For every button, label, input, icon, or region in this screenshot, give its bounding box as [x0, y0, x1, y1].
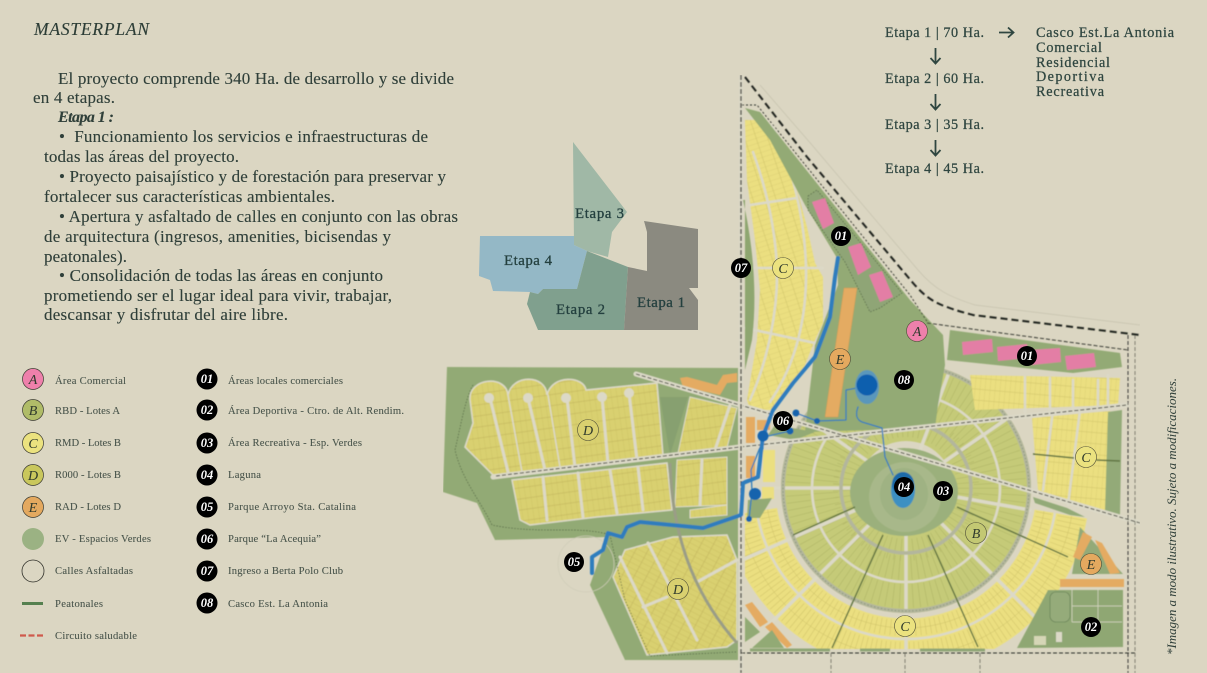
- stage labels: [504, 206, 685, 318]
- text block: project description: El proyecto comprende 340 Ha. de desarrollo y se divide: [58, 69, 454, 88]
- zone labels: Calles Asfaltadas: [55, 566, 133, 577]
- badge 08: 08: [898, 373, 911, 387]
- zone labels: R000 - Lotes B: [55, 470, 121, 481]
- center green disc: [850, 448, 958, 536]
- map number badges: [564, 226, 1101, 637]
- place labels: Laguna: [228, 470, 261, 481]
- ring streets: [783, 365, 1029, 611]
- legend: places: [196, 368, 404, 614]
- west green base: [443, 367, 738, 660]
- text block: project description: todas las áreas del proyecto.: [44, 147, 239, 166]
- marker C south: C: [900, 620, 910, 635]
- south-east orange lots: [1060, 527, 1124, 587]
- text block: project description: [33, 69, 458, 324]
- badge 02: [1081, 617, 1101, 637]
- stages list: Etapa 2 | 60 Ha.: [885, 71, 984, 87]
- badge 08: [894, 370, 914, 390]
- badge 06: [196, 528, 218, 550]
- stage labels: Etapa 4: [504, 253, 553, 269]
- place labels: Áreas locales comerciales: [228, 375, 343, 387]
- badge 01: [196, 368, 218, 390]
- stage labels: Etapa 1: [637, 295, 685, 311]
- C lots ring: [744, 508, 1088, 650]
- badge 06: 06: [777, 414, 790, 428]
- text block: project description: • Proyecto paisajístico y de forestación para preservar y: [59, 167, 446, 186]
- uses list: Comercial: [1036, 40, 1102, 56]
- thick north dashed road: [745, 77, 1140, 335]
- north-east green strip: [947, 330, 1122, 373]
- place labels: Área Deportiva - Ctro. de Alt. Rendim.: [228, 405, 404, 417]
- marker C: [22, 432, 44, 454]
- text block: project description: • Apertura y asfaltado de calles en conjunto con las obras: [59, 207, 458, 226]
- crescent streets: [745, 125, 823, 402]
- west sector: [443, 367, 738, 660]
- arrow: stage 1 to uses: [999, 28, 1014, 38]
- stages list: Etapa 4 | 45 Ha.: [885, 161, 984, 177]
- badge 01 north: [831, 226, 851, 246]
- pink commercial lots east: [962, 339, 1096, 370]
- stage 2 shape: [527, 251, 628, 330]
- east sector: [738, 108, 1124, 656]
- north C crescent lots: [745, 120, 823, 410]
- marker C north: [772, 258, 794, 278]
- marker D south: [668, 578, 688, 600]
- marker C south: [894, 616, 916, 636]
- badge 01 east: 01: [1021, 349, 1033, 363]
- stages list: Etapa 3 | 35 Ha.: [885, 117, 984, 133]
- marker D south: D: [672, 583, 683, 598]
- sports center: [1017, 590, 1123, 648]
- marker E south east: E: [1086, 558, 1096, 573]
- stage 3 shape: [573, 142, 627, 257]
- D lots south block: [512, 463, 672, 525]
- badge 02: [196, 400, 218, 420]
- fine water channels: [749, 388, 893, 519]
- marker A: [906, 320, 928, 342]
- marker B: B: [972, 527, 981, 542]
- marker E casco: E: [835, 353, 845, 368]
- health circuit swatch: [20, 634, 44, 637]
- zone labels: EV - Espacios Verdes: [55, 534, 151, 545]
- marker C north: C: [778, 262, 788, 277]
- acequia stream: [592, 258, 838, 573]
- badge 05: 05: [568, 555, 580, 569]
- park circle near arroyo: [558, 536, 614, 592]
- place labels: Ingreso a Berta Polo Club: [228, 566, 343, 577]
- commercial island: [808, 190, 902, 312]
- central lagoon: [891, 472, 915, 508]
- badge 03: [196, 432, 218, 454]
- uses list: Deportiva: [1036, 69, 1105, 85]
- marker D: D: [27, 469, 38, 484]
- vertical access road: [739, 75, 743, 673]
- place labels: Parque “La Acequia”: [228, 534, 321, 545]
- south service strip: [750, 648, 985, 652]
- marker E: [22, 496, 44, 518]
- marker A: A: [912, 325, 922, 340]
- uses list: Casco Est.La Antonia: [1036, 25, 1175, 41]
- zone labels: Área Comercial: [55, 375, 126, 387]
- D lots east blocks: [660, 397, 737, 518]
- stages list: [885, 25, 1014, 177]
- zone labels: Circuito saludable: [55, 631, 137, 642]
- marker E casco: [830, 348, 850, 370]
- badge 03: [933, 481, 953, 501]
- text block: project description: de arquitectura (ingresos, amenities, bicisendas y: [44, 227, 392, 246]
- text block: project description: Etapa 1 :: [57, 109, 114, 126]
- east C lots: [970, 375, 1122, 517]
- title: MASTERPLAN: [33, 19, 150, 39]
- casco pond: [855, 370, 879, 404]
- west boundary path: [455, 385, 736, 656]
- D lots north block: [465, 379, 663, 475]
- marker E: E: [28, 501, 38, 516]
- badge 05: [196, 496, 218, 518]
- zone labels: [55, 375, 151, 642]
- zone labels: RBD - Lotes A: [55, 406, 120, 417]
- text block: project description: • Consolidación de todas las áreas en conjunto: [59, 266, 383, 285]
- orange E lots column: [825, 288, 857, 417]
- badge 04: 04: [201, 468, 213, 482]
- badge 07: 07: [201, 564, 214, 578]
- north boundary inner line: [742, 105, 928, 323]
- zone labels: RMD - Lotes B: [55, 438, 121, 449]
- pedestrian walkways: [793, 454, 1120, 648]
- place labels: [228, 375, 404, 610]
- badge 03: 03: [201, 436, 213, 450]
- marker D north west: [578, 420, 598, 440]
- legend: zones: [20, 368, 151, 642]
- marker D: [22, 464, 44, 486]
- zone labels: Peatonales: [55, 599, 103, 610]
- badge 05: 05: [201, 500, 213, 514]
- uses list: Recreativa: [1036, 84, 1105, 100]
- marker E south east: [1080, 554, 1102, 574]
- text block: project description: en 4 etapas.: [33, 88, 115, 107]
- badge 04: [894, 477, 914, 497]
- casco green park: [745, 108, 945, 432]
- marker B: [22, 400, 44, 420]
- badge 01: 01: [201, 372, 213, 386]
- pink commercial lots north: [812, 198, 893, 302]
- zone labels: RAD - Lotes D: [55, 502, 121, 513]
- uses list: [1036, 25, 1175, 100]
- green spaces swatch: [22, 528, 44, 550]
- badge 07: [731, 258, 751, 278]
- badge 02: 02: [201, 403, 213, 417]
- marker C east: [1076, 446, 1096, 468]
- badge 04: 04: [898, 480, 910, 494]
- marker D north west: D: [582, 424, 593, 439]
- masterplan map: [443, 75, 1140, 673]
- text block: project description: peatonales).: [44, 247, 127, 266]
- main road network: [493, 75, 1140, 673]
- place labels: Área Recreativa - Esp. Verdes: [228, 437, 362, 449]
- stage labels: Etapa 2: [556, 302, 605, 318]
- west internal streets: [490, 393, 737, 653]
- badge 06: [773, 411, 793, 431]
- badge 05: [564, 552, 584, 572]
- pedestrian line swatch: [22, 602, 43, 605]
- cul-de-sacs: [484, 388, 634, 403]
- arrow: stage 1 to 2: [930, 48, 940, 64]
- badge 04: [196, 464, 218, 486]
- marker A: [22, 368, 44, 390]
- badge 07: 07: [735, 261, 748, 275]
- D lots south sector: [613, 535, 737, 655]
- text block: project description: fortalecer sus características ambientales.: [44, 187, 335, 206]
- badge 01 east: [1017, 346, 1037, 366]
- text block: project description: • Funcionamiento los servicios e infraestructuras de: [59, 127, 428, 146]
- badge 08: [196, 592, 218, 614]
- badge 07: [196, 560, 218, 582]
- water system: [592, 258, 915, 573]
- green crescent edge: [743, 200, 754, 370]
- south and east boundary roads: [741, 323, 1135, 673]
- badge 03: 03: [937, 484, 949, 498]
- arrow: stage 2 to 3: [930, 94, 940, 110]
- B lots ring: [798, 380, 1014, 596]
- map letter markers: [578, 258, 1102, 636]
- marker B: B: [29, 404, 38, 419]
- orange and yellow lots along acequia: [746, 417, 815, 518]
- badge 01 north: 01: [835, 229, 847, 243]
- map artwork: [443, 75, 1140, 673]
- paved streets swatch: [22, 560, 44, 582]
- avenue roads: [493, 374, 1140, 523]
- place labels: Casco Est. La Antonia: [228, 599, 328, 610]
- marker C east: C: [1081, 451, 1091, 466]
- stage labels: Etapa 3: [575, 206, 624, 222]
- stage 4 shape: [479, 236, 587, 294]
- water nodes: [746, 410, 820, 522]
- radial streets: [742, 375, 1040, 648]
- marker A: A: [28, 373, 38, 388]
- place labels: Parque Arroyo Sta. Catalina: [228, 502, 356, 513]
- orange E lots west: [680, 373, 737, 395]
- arrow: stage 3 to 4: [930, 140, 940, 156]
- marker C: C: [28, 437, 38, 452]
- uses list: Residencial: [1036, 55, 1110, 71]
- note: illustrative image: *Imagen a modo ilustrativo. Sujeto a modificaciones.: [1164, 378, 1179, 655]
- stage 1 shape: [624, 221, 698, 330]
- stages list: Etapa 1 | 70 Ha.: [885, 25, 984, 41]
- marker B: [966, 522, 986, 544]
- south-west corner orange lots: [745, 602, 792, 648]
- text block: project description: prometiendo ser el lugar ideal para vivir, trabajar,: [44, 286, 392, 305]
- text block: project description: descansar y disfrutar del aire libre.: [44, 305, 288, 324]
- badge 06: 06: [201, 532, 214, 546]
- stages key map: [479, 142, 698, 330]
- west arc avenue: [670, 463, 737, 643]
- badge 02: 02: [1085, 620, 1097, 634]
- badge 08: 08: [201, 596, 214, 610]
